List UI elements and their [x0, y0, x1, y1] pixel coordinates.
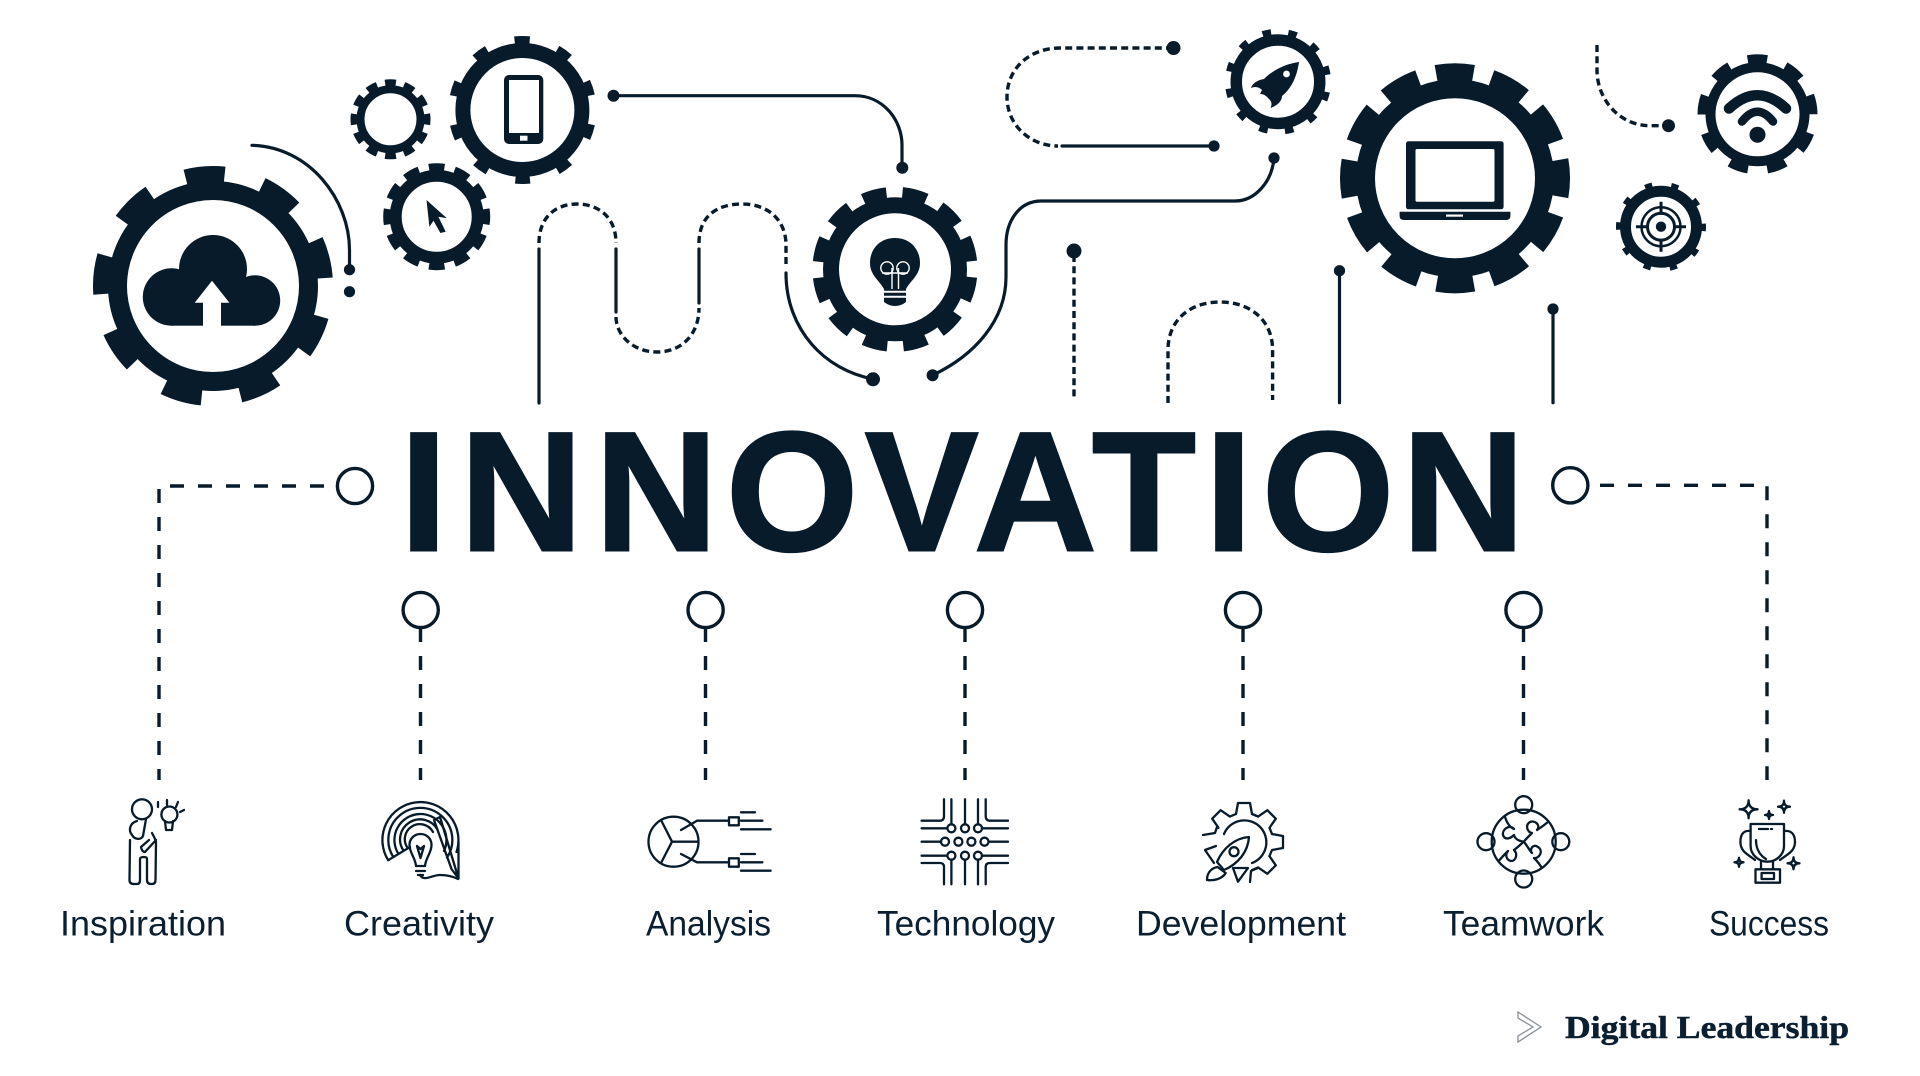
gear: laptop [1335, 58, 1575, 298]
connector: pin under laptop left [1334, 265, 1345, 403]
gear: empty small [350, 79, 431, 160]
label: Success: Success [1709, 904, 1829, 944]
logo: Digital Leadership wordmark: Digital Leadership [1565, 1009, 1849, 1045]
icon: teamwork puzzle [1478, 796, 1569, 888]
icon: cursor arrow [426, 200, 447, 233]
icon: analysis pie and list [648, 812, 771, 871]
connector: dashed arch [1168, 302, 1273, 403]
icon: rocket [1251, 62, 1299, 108]
gear: smartphone [447, 35, 598, 185]
connector: dashed loop near rocket [1007, 41, 1220, 152]
label: Development: Development [1136, 904, 1346, 944]
gear: rocket [1217, 21, 1339, 143]
icon: target [1636, 202, 1686, 252]
icon: inspiration person with bulb [130, 799, 184, 884]
icon: wifi [1729, 95, 1786, 143]
gear: cursor [381, 161, 492, 272]
icon: cloud upload [143, 235, 280, 327]
connector: development [1225, 592, 1261, 780]
logo: chevron mark [1518, 1012, 1541, 1042]
connector: serpentine line above the title [539, 204, 880, 403]
connector: teamwork [1506, 592, 1541, 780]
connector: pin under laptop right [1547, 303, 1559, 403]
connector: rocket to bulb [927, 152, 1280, 381]
connector: cloud gear arc with two dots [252, 145, 355, 297]
title: INNOVATION [400, 397, 1525, 587]
connector: creativity [403, 592, 438, 780]
icon: development gear and rocket [1203, 803, 1283, 882]
connector: technology [947, 592, 983, 780]
icon: light bulb [870, 238, 920, 306]
connector: left dashed to inspiration [159, 468, 373, 780]
icon: smartphone [504, 75, 543, 144]
icon: technology circuit [922, 799, 1008, 884]
gear: light bulb [812, 187, 978, 352]
icon: success trophy with stars [1734, 800, 1800, 883]
label: Teamwork: Teamwork [1443, 904, 1605, 944]
connector: right dashed to success [1553, 468, 1767, 780]
label: Analysis: Analysis [646, 904, 771, 944]
connector: phone to bulb [608, 90, 908, 174]
gear: cloud upload [80, 153, 346, 419]
gear: target [1606, 172, 1716, 281]
connector: dashed pin [1066, 244, 1082, 397]
icon: creativity bulb and pencil [382, 802, 458, 879]
gear: wifi [1694, 51, 1821, 177]
label: Inspiration: Inspiration [60, 904, 226, 944]
connector: analysis [688, 592, 723, 780]
icon: laptop [1400, 141, 1510, 220]
connector: dashed curve to wifi [1597, 45, 1675, 132]
label: Technology: Technology [877, 904, 1055, 944]
label: Creativity: Creativity [344, 904, 495, 944]
